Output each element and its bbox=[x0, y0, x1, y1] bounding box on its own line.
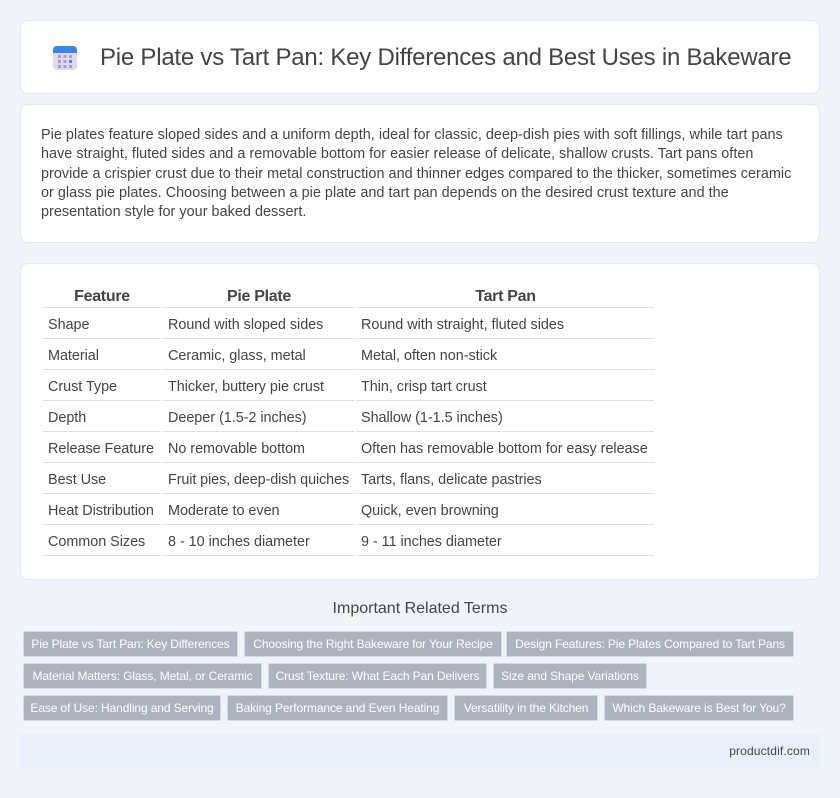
paragraph text: or glass pie plates. Choosing between a pie plate and tart pan depends on the desired crust texture and the bbox=[41, 185, 729, 201]
table contents: Thicker, buttery pie crust bbox=[168, 379, 324, 395]
related terms tags: Material Matters: Glass, Metal, or Ceramic bbox=[32, 669, 253, 683]
table contents: Crust Type bbox=[48, 379, 117, 395]
table contents: Round with straight, fluted sides bbox=[361, 317, 564, 333]
table contents: Heat Distribution bbox=[48, 503, 154, 519]
table contents: Material bbox=[48, 348, 99, 364]
table contents bbox=[43, 288, 654, 556]
table contents: Tart Pan bbox=[475, 288, 536, 305]
table contents: No removable bottom bbox=[168, 441, 305, 457]
header panel bbox=[20, 20, 820, 94]
title: Pie Plate vs Tart Pan: Key Differences and Best Uses in Bakeware bbox=[100, 44, 791, 71]
table contents: Feature bbox=[74, 288, 130, 305]
intro paragraph panel bbox=[20, 104, 820, 243]
table contents: Shallow (1-1.5 inches) bbox=[361, 410, 503, 426]
table contents: Ceramic, glass, metal bbox=[168, 348, 306, 364]
related terms tags: Which Bakeware is Best for You? bbox=[612, 701, 786, 715]
related terms tags: Size and Shape Variations bbox=[501, 669, 639, 683]
table contents: Release Feature bbox=[48, 441, 154, 457]
table contents: Pie Plate bbox=[227, 288, 291, 305]
footer bar bbox=[20, 734, 820, 768]
paragraph text: presentation style for your baked dessert. bbox=[41, 204, 306, 220]
related terms tags: Versatility in the Kitchen bbox=[464, 701, 588, 715]
related terms tags: Choosing the Right Bakeware for Your Recipe bbox=[253, 637, 493, 651]
table contents: Fruit pies, deep-dish quiches bbox=[168, 472, 349, 488]
table contents: Depth bbox=[48, 410, 86, 426]
table contents: Tarts, flans, delicate pastries bbox=[361, 472, 542, 488]
related terms tags bbox=[23, 631, 794, 721]
table contents: Metal, often non-stick bbox=[361, 348, 497, 364]
related terms tags: Crust Texture: What Each Pan Delivers bbox=[276, 669, 479, 683]
table contents: Quick, even browning bbox=[361, 503, 499, 519]
table contents: Common Sizes bbox=[48, 534, 145, 550]
related terms heading: Important Related Terms bbox=[333, 600, 507, 617]
related terms tags: Design Features: Pie Plates Compared to Tart Pans bbox=[515, 637, 785, 651]
paragraph text: Pie plates feature sloped sides and a uniform depth, ideal for classic, deep-dish pies with soft fillings, while tart pans bbox=[41, 127, 783, 143]
icon: calendar bbox=[53, 46, 77, 70]
table contents: Thin, crisp tart crust bbox=[361, 379, 487, 395]
paragraph text: have straight, fluted sides and a removable bottom for easier release of delicate, shallow crusts. Tart pans often bbox=[41, 146, 753, 162]
related terms tags: Pie Plate vs Tart Pan: Key Differences bbox=[31, 637, 230, 651]
related terms tags: Baking Performance and Even Heating bbox=[236, 701, 439, 715]
comparison table panel bbox=[20, 263, 820, 580]
table contents: Round with sloped sides bbox=[168, 317, 323, 333]
paragraph text bbox=[41, 127, 791, 220]
table contents: Shape bbox=[48, 317, 89, 333]
table contents: 8 - 10 inches diameter bbox=[168, 534, 310, 550]
comparison table bbox=[43, 288, 654, 556]
table contents: Best Use bbox=[48, 472, 106, 488]
table contents: Moderate to even bbox=[168, 503, 280, 519]
related terms tags: Ease of Use: Handling and Serving bbox=[30, 701, 214, 715]
paragraph text: provide a crispier crust due to their metal construction and thinner edges compared to the thicker, sometimes ceramic bbox=[41, 166, 791, 182]
table contents: Often has removable bottom for easy release bbox=[361, 441, 648, 457]
table contents: 9 - 11 inches diameter bbox=[361, 534, 502, 550]
table contents: Deeper (1.5-2 inches) bbox=[168, 410, 307, 426]
footer source text: productdif.com bbox=[729, 744, 810, 758]
